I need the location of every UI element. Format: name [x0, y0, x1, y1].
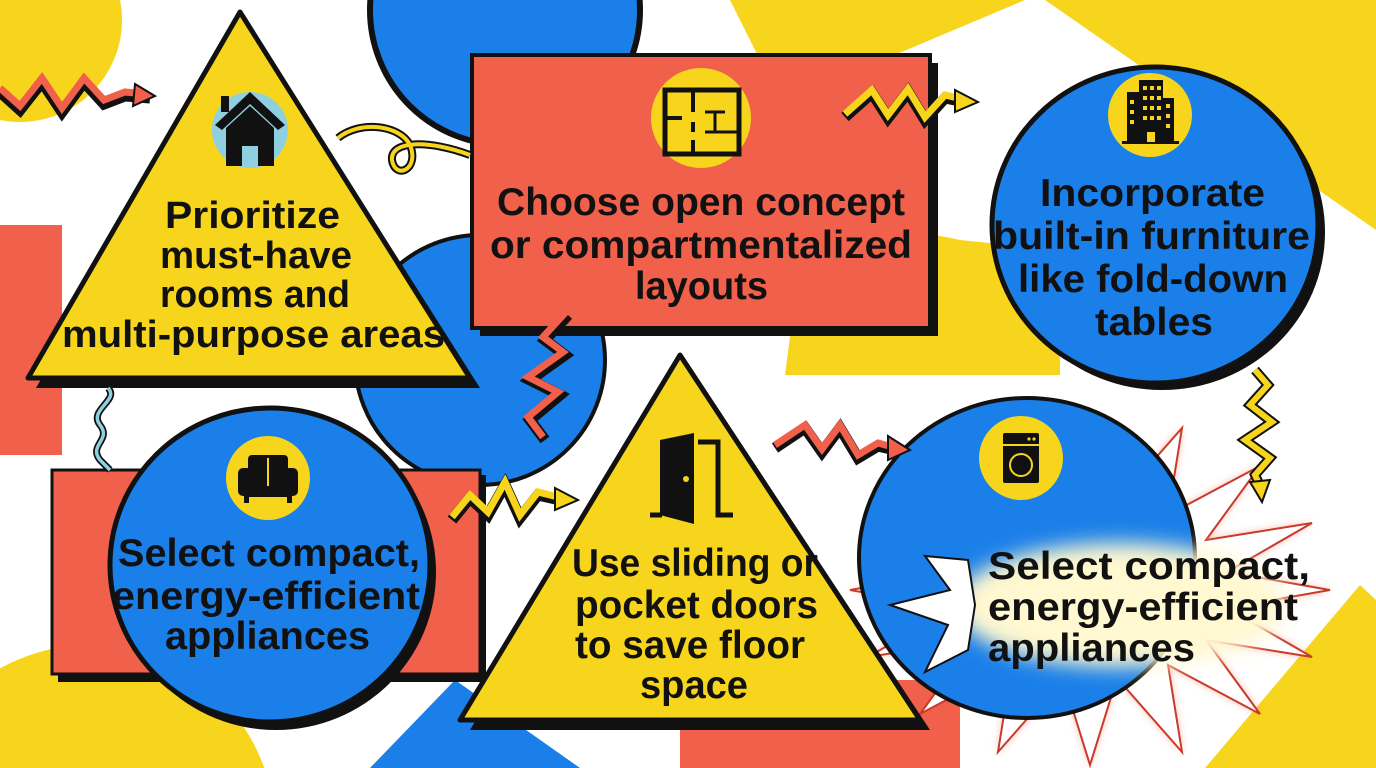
panel 5: triangle doors — [460, 355, 930, 730]
arrow: yellow zigzag down — [1245, 370, 1272, 502]
panel 4: blue circle appliances — [110, 408, 436, 730]
text: appliances — [112, 532, 420, 658]
icon: sofa — [226, 436, 310, 520]
icon: floor plan — [651, 68, 751, 168]
text: built-in furniture: tables — [1095, 301, 1213, 344]
panel 1: triangle prioritize — [28, 12, 480, 388]
panel 3: blue circle built-in furniture — [992, 67, 1325, 390]
icon: door — [650, 433, 733, 524]
arrow: red zigzag bottom — [775, 425, 910, 460]
arrow: yellow zigzag top — [845, 89, 978, 120]
text: layouts — [490, 181, 912, 308]
text: layouts: Choose open concept — [497, 181, 905, 224]
arrow: red zigzag vertical — [528, 312, 568, 440]
arrow: red zigzag top-left — [0, 78, 155, 112]
text: built-in furniture — [993, 172, 1310, 344]
starburst — [850, 415, 1330, 765]
text: built-in furniture: Incorporate — [1040, 172, 1265, 215]
text: appliances callout: energy-efficient — [988, 586, 1298, 629]
arrow: blue wiggle — [97, 388, 111, 470]
text: built-in furniture: like fold-down — [1018, 258, 1288, 301]
text: appliances callout: Select compact, — [988, 545, 1310, 588]
icon: buildings — [1108, 73, 1192, 157]
text: appliances callout — [988, 545, 1310, 670]
icon: washing machine — [979, 416, 1063, 500]
text: appliances: appliances — [165, 615, 370, 658]
panel 6: blue circle appliances with starburst — [859, 398, 1310, 718]
text: layouts: layouts — [635, 265, 768, 308]
text: appliances: energy-efficient — [112, 575, 420, 618]
text: doors — [572, 542, 818, 707]
text: appliances callout: appliances — [988, 627, 1195, 670]
icon: house — [212, 92, 288, 168]
panel 2: red rectangle layouts — [472, 55, 938, 336]
text: doors: space — [640, 664, 748, 707]
text: appliances: Select compact, — [118, 532, 420, 575]
text: prioritize: multi-purpose areas — [62, 314, 445, 356]
text: built-in furniture: built-in furniture — [993, 215, 1310, 258]
text: prioritize: rooms and — [160, 274, 350, 316]
text: doors: to save floor — [575, 624, 805, 667]
text: prioritize: Prioritize — [165, 195, 340, 237]
text: layouts: or compartmentalized — [490, 224, 912, 267]
text: doors: Use sliding or — [572, 542, 818, 585]
text: doors: pocket doors — [575, 584, 818, 627]
text: prioritize — [62, 195, 445, 356]
arrow: yellow zigzag bottom — [452, 482, 578, 520]
text: prioritize: must-have — [160, 235, 352, 277]
arrow: yellow loop — [338, 127, 470, 171]
